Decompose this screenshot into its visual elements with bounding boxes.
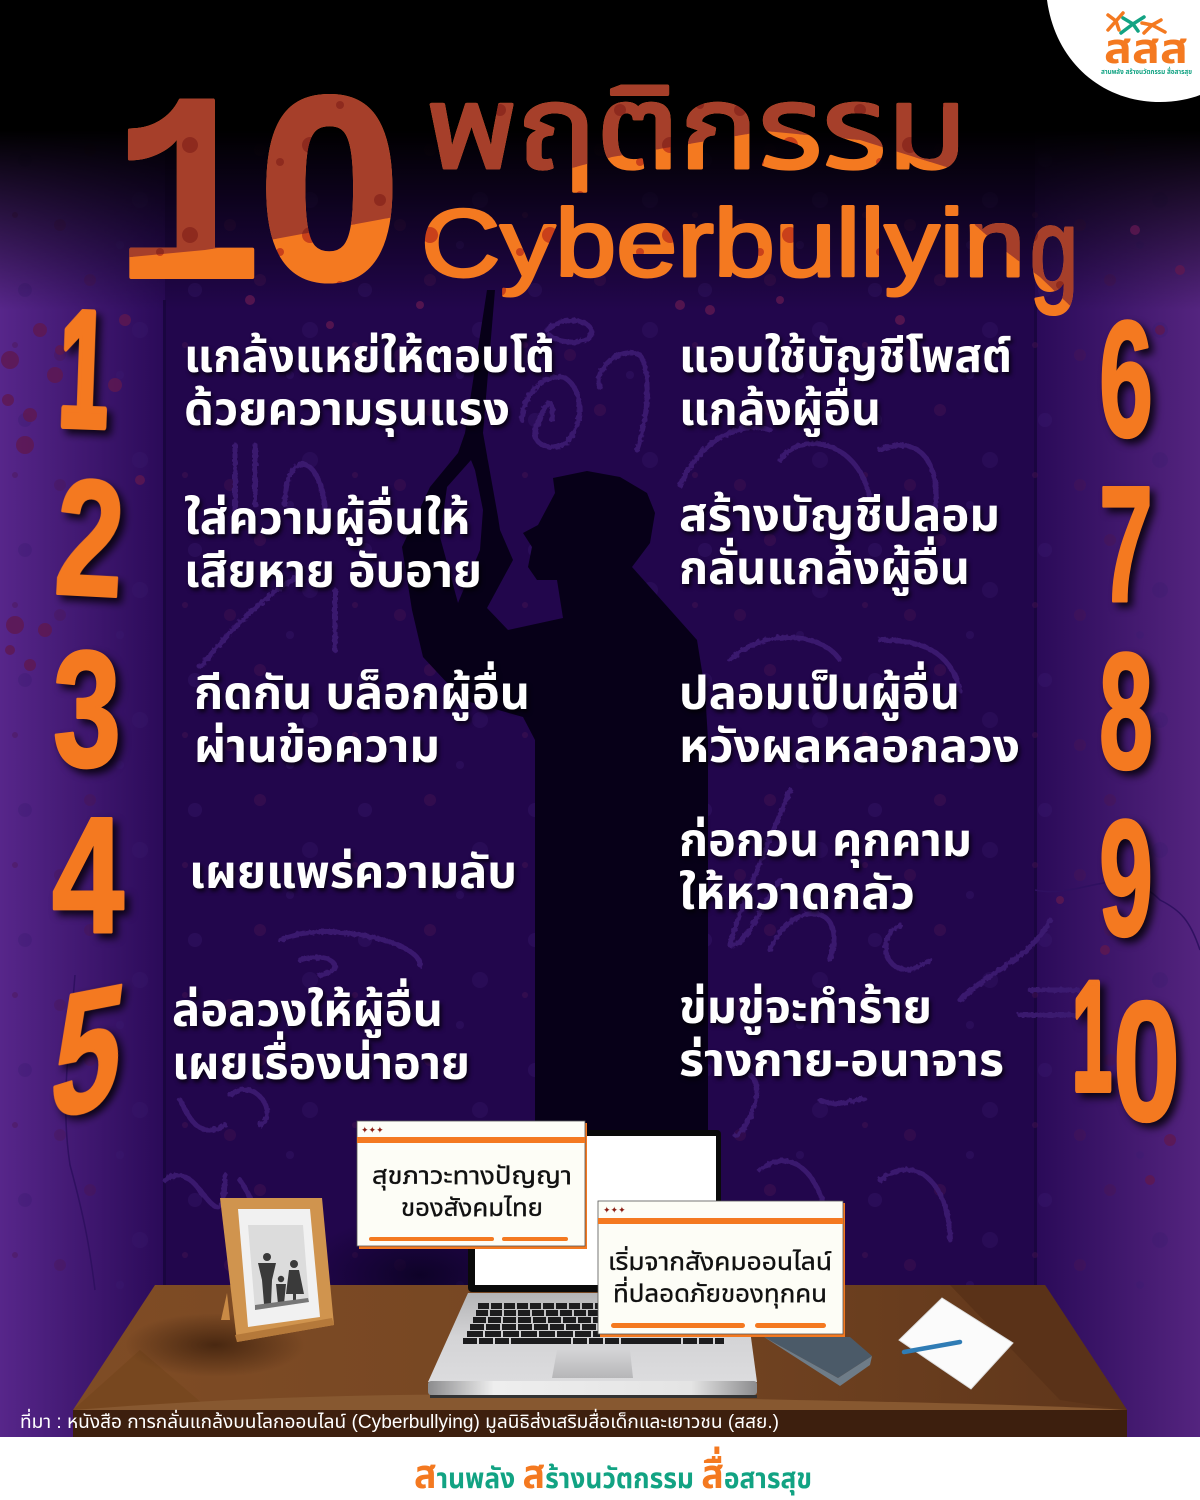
numbers left: 5 [42,946,134,1156]
popup window 2: เริ่มจากสังคมออนไลน์ [608,1245,832,1276]
title: Thai and English words: พฤติกรรม [426,63,967,193]
wall shadow [300,1215,540,1335]
title: number 10: 1 [113,55,263,358]
title: Thai and English words: g [1030,184,1078,316]
numbers right: 9 [1099,786,1153,970]
numbers left: 2 [51,444,129,632]
list items right: สร้างบัญชีปลอม [679,489,1000,541]
phone [764,1337,872,1386]
logo badge [1047,0,1200,102]
paper and pencil [899,1298,1013,1389]
list items right: ปลอมเป็นผู้อื่น [679,661,960,721]
list items left: ผ่านข้อความ [194,720,440,772]
footer slogan: สานพลัง สร้างนวัตกรรม สื่อสารสุข [414,1446,812,1497]
list items left: กีดกัน บล็อกผู้อื่น [194,661,530,721]
list items left: แกล้งแหย่ให้ตอบโต้ [184,330,555,382]
keyboard [463,1306,724,1341]
title: number 10: 0 [258,42,401,335]
title: number 10: 1 [113,55,263,358]
list items left: เผยเรื่องน่าอาย [172,1031,470,1089]
numbers right: 7 [1099,452,1153,636]
footer band [0,1437,1200,1500]
title: number 10: 0 [258,42,401,335]
logo badge: สสส [1104,25,1188,72]
source note: ที่มา : หนังสือ การกลั่นแกล้งบนโลกออนไลน์ (Cyberbullying) มูลนิธิส่งเสริมสื่อเด็กและเยาวชน (สสย.) [20,1408,779,1434]
list items left: ด้วยความรุนแรง [184,383,510,437]
list items right: กลั่นแกล้งผู้อื่น [679,536,970,596]
title: Thai and English words: พฤติกรรม [426,63,967,193]
list items left: เสียหาย อับอาย [184,545,482,597]
picture frame [125,1198,334,1377]
handwriting scribbles [165,320,1078,1260]
numbers right [1072,287,1180,1157]
picture: family [255,1253,309,1310]
title: number 10 [128,94,392,284]
numbers right: 1 [1072,950,1112,1124]
list items right: ก่อกวน คุกคาม [679,814,972,868]
list items left: ล่อลวงให้ผู้อื่น [172,978,443,1038]
title: Thai and English words: g [1030,184,1078,316]
logo badge: สานพลัง สร้างนวัตกรรม สื่อสารสุข [1101,66,1192,77]
popup window 1: ✦✦✦ [361,1125,384,1135]
laptop [428,1130,757,1398]
list items right: แกล้งผู้อื่น [679,377,881,437]
desk [73,1285,1127,1437]
popup window 2: ✦✦✦ [603,1205,626,1215]
popup window 2 [598,1201,845,1337]
numbers left: 4 [52,783,124,967]
numbers left: 3 [53,617,121,801]
popup window 1: ของสังคมไทย [401,1194,543,1222]
numbers right: 6 [1099,287,1153,471]
red splatter spots [1,225,1185,1185]
list items right [679,330,1020,1086]
list items left: ใส่ความผู้อื่นให้ [184,486,470,546]
title: Thai and English words: Cyberbullyin [421,190,1025,297]
popup window 2: ที่ปลอดภัยของทุกคน [613,1276,827,1309]
title: Thai and English words [421,63,1078,316]
numbers right: 8 [1099,619,1153,803]
popup window 1 [357,1121,587,1249]
title: Thai and English words: Cyberbullyin [421,190,1025,297]
list items right: แอบใช้บัญชีโพสต์ [679,330,1012,382]
numbers left [42,276,134,1156]
list items right: หวังผลหลอกลวง [679,720,1020,772]
list items left [172,330,555,1089]
list items right: ร่างกาย-อนาจาร [679,1034,1004,1086]
silhouette: hanging figure [402,290,708,1135]
list items right: ข่มขู่จะทำร้าย [679,981,932,1035]
numbers left: 1 [56,276,112,462]
icon: three figures [1108,13,1165,33]
title [113,42,1078,358]
list items right: ให้หวาดกลัว [679,867,915,919]
list items left: เผยแพร่ความลับ [189,846,517,898]
popup window 1: สุขภาวะทางปัญญา [372,1162,572,1191]
